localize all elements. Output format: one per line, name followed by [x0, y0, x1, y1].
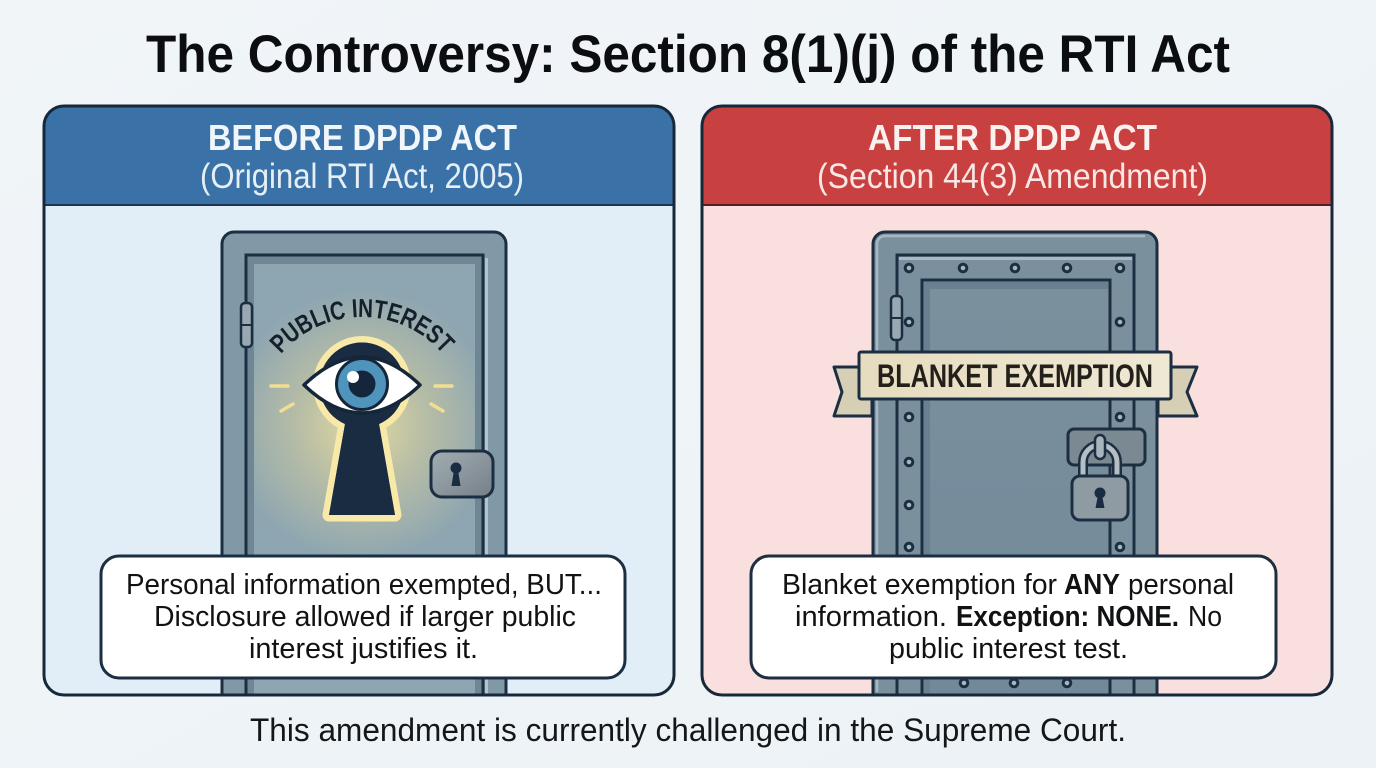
callout: after: No: [1188, 601, 1222, 633]
callout: after: information.: [795, 601, 947, 633]
title: The Controversy: Section 8(1)(j) of the RTI Act: [146, 25, 1230, 84]
callout: before: Personal information exempted, BUT...: [126, 569, 602, 601]
callout: before: Disclosure allowed if larger public: [154, 601, 576, 633]
hinge: [241, 303, 252, 347]
panel outline: after: [702, 106, 1332, 695]
subheading: original RTI Act: (Original RTI Act, 2005): [200, 157, 524, 196]
padlock and hasp: [1068, 429, 1145, 520]
banner: blanket exemption: [859, 352, 1171, 399]
callout: after: personal: [1128, 569, 1234, 601]
panel outline: before: [44, 106, 674, 695]
keyhole: [320, 343, 404, 515]
panel: before DPDP Act: [42, 104, 676, 696]
panel: after DPDP Act: [702, 106, 1332, 700]
callout: after: ANY: [1064, 569, 1120, 601]
panel body: after: [702, 106, 1332, 695]
ribbon tails: [834, 367, 1197, 416]
door frame: [873, 232, 1157, 700]
panel header: after: [702, 106, 1332, 206]
panel body: before: [44, 106, 674, 695]
illustration: sealed door: [873, 232, 1157, 700]
rivets: [905, 264, 1124, 687]
callout: after: Exception: NONE.: [956, 601, 1179, 633]
eye: [304, 357, 420, 413]
door frame: [222, 232, 506, 700]
door lock plate: [431, 451, 493, 497]
inner panel: [922, 280, 1110, 700]
callout: after: public interest test.: [889, 633, 1128, 665]
callout: after: [751, 556, 1276, 678]
door leaf: [246, 255, 483, 700]
heading: before DPDP Act: BEFORE DPDP ACT: [208, 117, 517, 158]
banner: blanket exemption: BLANKET EXEMPTION: [877, 358, 1153, 394]
subheading: section 44(3) amendment: (Section 44(3) Amendment): [817, 157, 1208, 196]
callout: after: Blanket exemption for: [782, 569, 1057, 601]
footer note: This amendment is currently challenged in the Supreme Court.: [250, 712, 1126, 748]
glow rays: [271, 386, 452, 411]
callout: before: [101, 556, 625, 678]
door leaf: [897, 255, 1134, 700]
illustration: door with keyhole: [220, 230, 508, 694]
hinge: [891, 296, 902, 340]
label: public interest: PUBLIC INTEREST: [269, 299, 456, 354]
callout: before: interest justifies it.: [249, 633, 478, 665]
panel header: before: [44, 106, 674, 206]
heading: after DPDP Act: AFTER DPDP ACT: [868, 117, 1157, 158]
